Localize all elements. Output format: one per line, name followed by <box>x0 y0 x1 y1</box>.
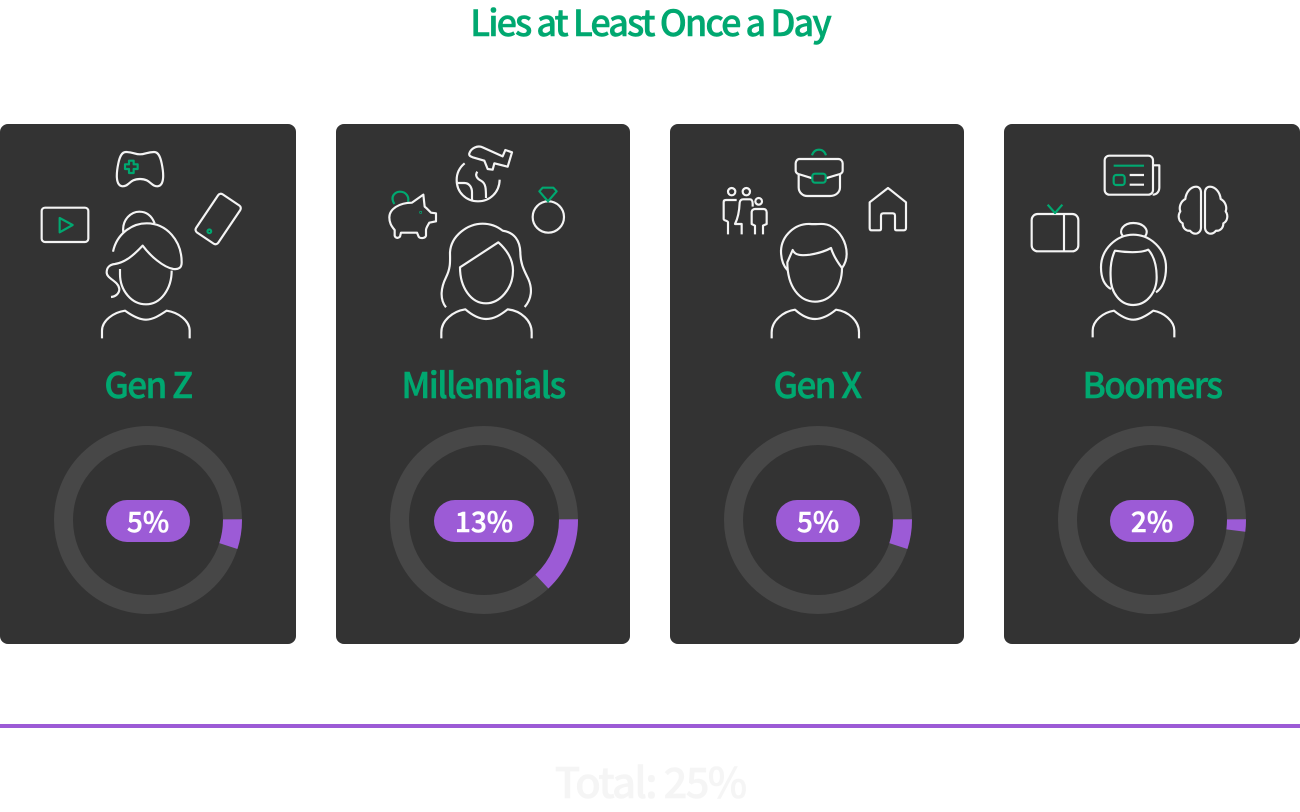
icon: globe and plane <box>457 147 512 201</box>
icon: smartphone <box>194 192 242 246</box>
icon: family <box>724 188 767 234</box>
panel: Gen Z <box>0 124 296 644</box>
person: woman with bun <box>102 212 190 338</box>
heading: Millennials: Millennials <box>401 358 565 409</box>
icon: piggy bank <box>389 192 436 238</box>
person: woman with long hair <box>441 224 532 338</box>
illustration: Millennial person and icons <box>388 145 566 338</box>
donut chart: Gen X 5% <box>724 426 912 614</box>
donut chart: Boomers 2% <box>1058 426 1246 614</box>
illustration: Gen Z person and icons <box>40 150 242 338</box>
icon: newspaper <box>1105 156 1159 195</box>
panel: Gen X <box>670 124 964 644</box>
value: 2% <box>1110 500 1194 542</box>
icon: brain <box>1179 187 1227 234</box>
heading: Gen Z: Gen Z <box>104 358 192 409</box>
value: 5% <box>776 500 860 542</box>
icon: game controller <box>117 152 163 186</box>
heading: Boomers: Boomers <box>1083 358 1221 409</box>
panel: Boomers <box>1004 124 1300 644</box>
value: 5%: 5% <box>127 501 169 541</box>
value: 5% <box>106 500 190 542</box>
heading: Gen X: Gen X <box>774 358 860 409</box>
donut chart: Gen Z 5% <box>54 426 242 614</box>
icon: video player <box>42 208 88 242</box>
icon: briefcase <box>796 150 843 196</box>
illustration: Gen X person and icons <box>722 148 908 338</box>
illustration: Boomer person and icons <box>1030 154 1228 338</box>
value: 13% <box>434 500 534 542</box>
person: man <box>772 224 859 338</box>
divider line <box>0 724 1300 728</box>
icon: house <box>870 188 906 230</box>
value: 5%: 5% <box>797 501 839 541</box>
value: 2%: 2% <box>1131 501 1173 541</box>
icon: diamond ring <box>533 188 564 233</box>
donut chart: Millennials 13% <box>390 426 578 614</box>
panel: Millennials <box>336 124 630 644</box>
person: older woman with bun <box>1093 223 1174 337</box>
icon: television <box>1032 205 1078 251</box>
total: Total: 25% <box>555 750 745 811</box>
value: 13%: 13% <box>455 501 513 541</box>
